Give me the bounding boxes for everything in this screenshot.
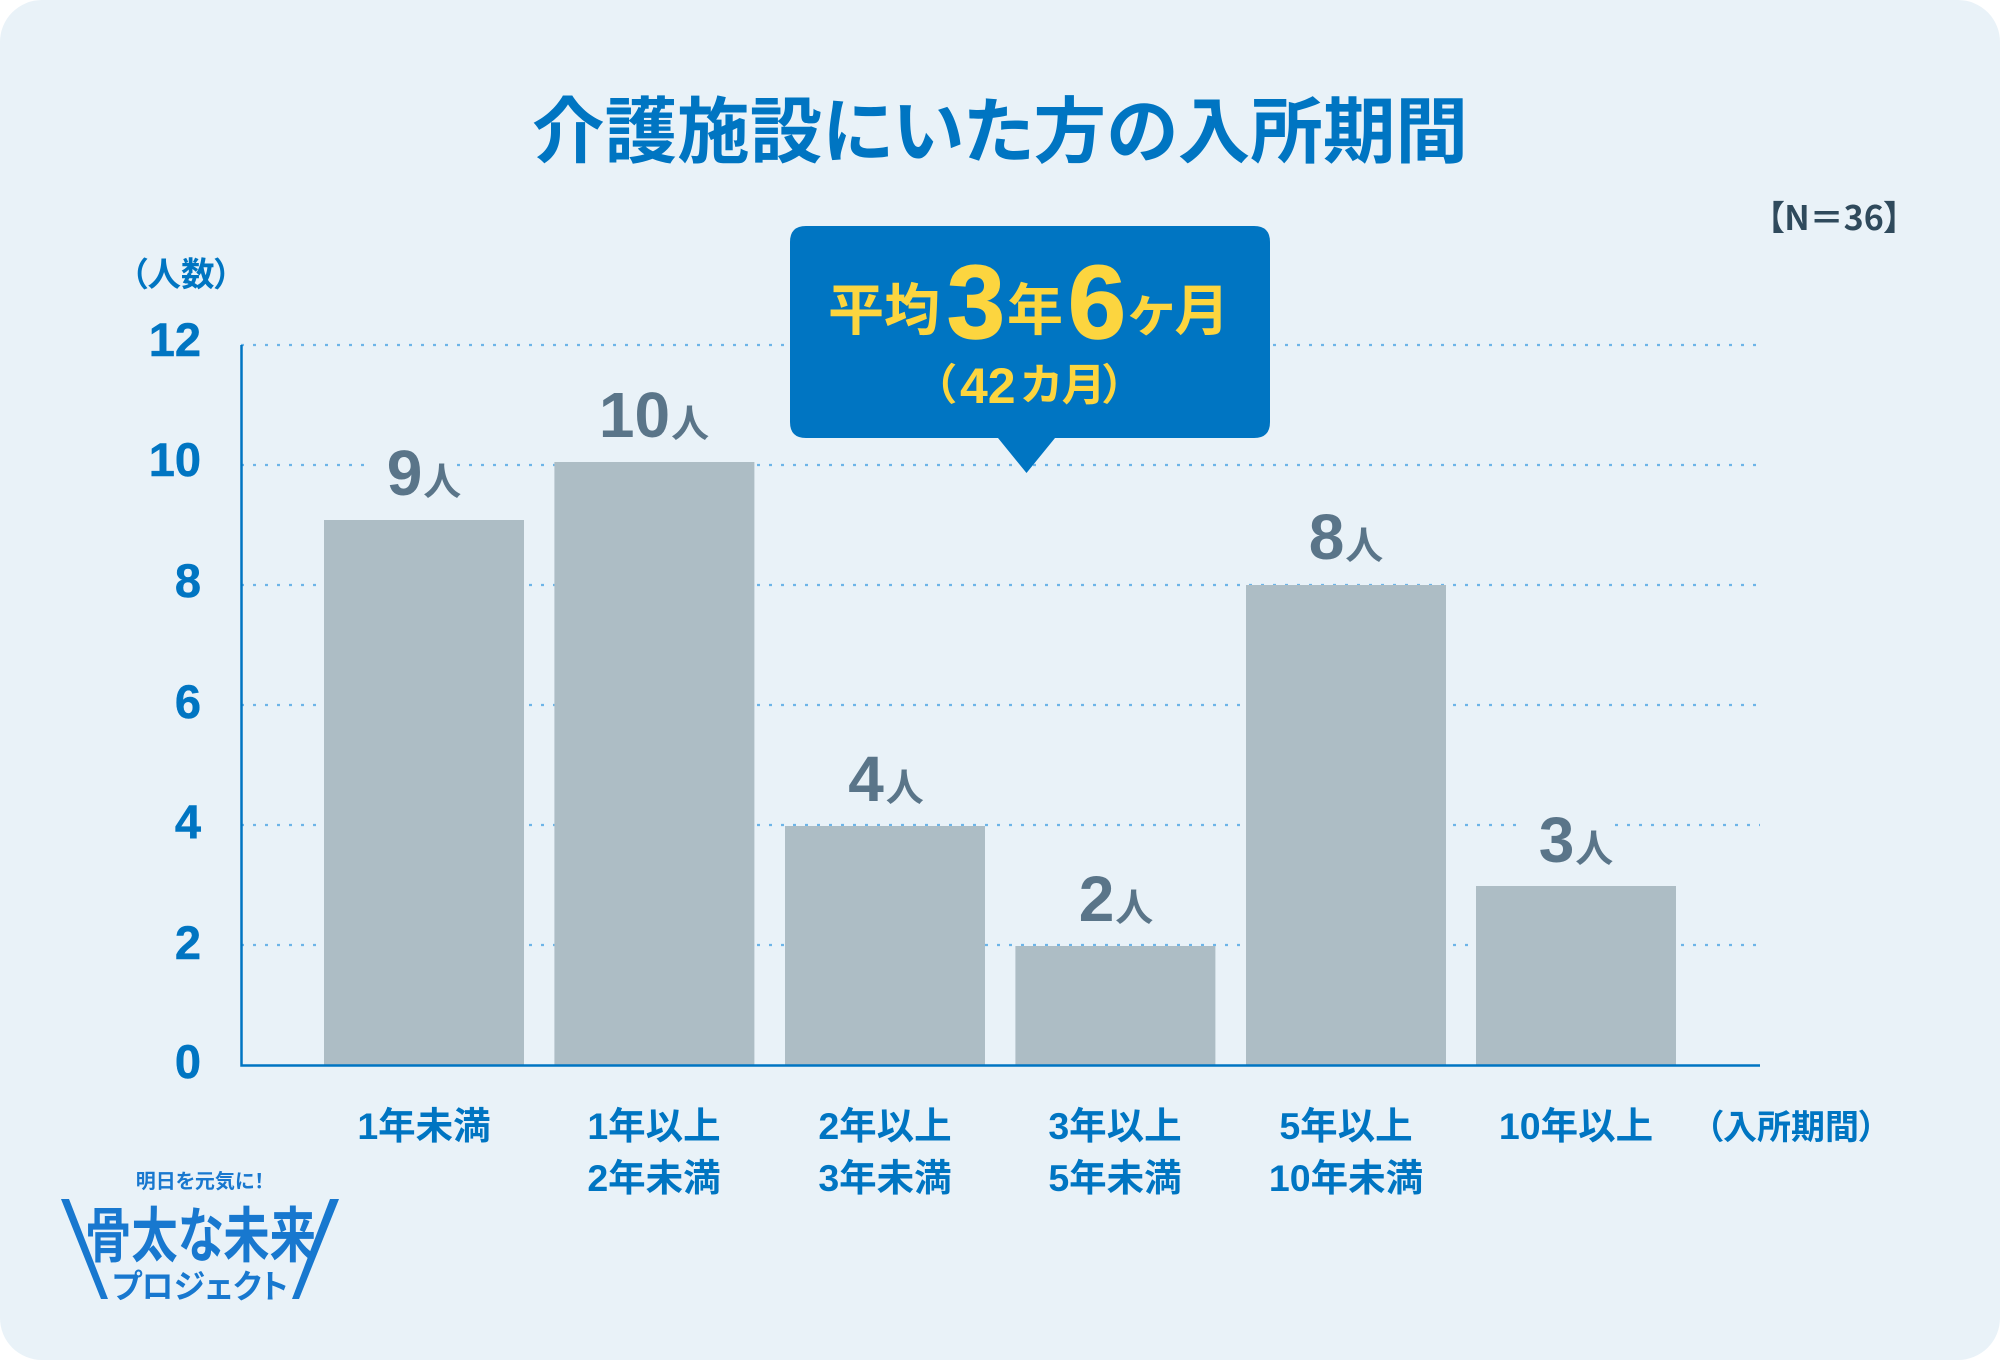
sample size note: 【N＝36】 <box>1767 191 1901 240</box>
callout sub figure: カ月 <box>1021 349 1106 413</box>
y axis tick labels: 4 <box>175 795 201 848</box>
y axis tick labels <box>149 313 201 1088</box>
callout: average stay <box>790 226 1270 473</box>
value labels: 2人 <box>1079 863 1153 935</box>
category labels: 5年未満 <box>1048 1147 1182 1202</box>
category labels: 3年以上 <box>1048 1095 1182 1150</box>
y axis tick labels: 8 <box>175 554 201 607</box>
category labels: 1年以上 <box>587 1095 721 1150</box>
callout main figure: 6 <box>1068 245 1126 361</box>
callout main figure <box>828 245 1229 361</box>
logo sub wordmark: プロジェクト <box>112 1260 288 1308</box>
bars <box>324 462 1676 1065</box>
category labels: 5年以上 <box>1279 1095 1413 1150</box>
title: 介護施設にいた方の入所期間 <box>532 73 1468 178</box>
value labels: 4人 <box>848 743 924 815</box>
category labels: 10年以上 <box>1499 1095 1653 1150</box>
logo left bracket <box>61 1199 108 1299</box>
callout main figure: 年 <box>1007 266 1063 347</box>
callout sub figure <box>934 349 1124 414</box>
callout sub figure: ） <box>1102 351 1124 413</box>
callout main figure: 平均 <box>828 266 940 347</box>
value labels <box>387 379 1613 935</box>
callout main figure: 3 <box>947 245 1005 361</box>
category labels: 3年未満 <box>818 1147 952 1202</box>
callout sub figure: （ <box>934 351 956 413</box>
value labels: 10人 <box>599 379 709 451</box>
category labels: 10年未満 <box>1269 1147 1423 1202</box>
logo main wordmark: 骨太な未来 <box>85 1188 316 1275</box>
value labels: 3人 <box>1539 804 1613 876</box>
value labels: 8人 <box>1309 501 1383 573</box>
y axis tick labels: 12 <box>149 313 201 366</box>
y axis tick labels: 2 <box>175 916 201 969</box>
bar chart <box>149 313 1876 1202</box>
logo right bracket <box>292 1199 339 1299</box>
y axis tick labels: 10 <box>149 433 201 486</box>
y axis tick labels: 0 <box>175 1035 201 1088</box>
axes <box>242 345 1760 1066</box>
category labels: 1年未満 <box>357 1095 491 1150</box>
y axis tick labels: 6 <box>175 675 201 728</box>
value labels: 9人 <box>387 437 461 509</box>
logo tagline: 明日を元気に！ <box>136 1165 264 1194</box>
logo: 骨太な未来プロジェクト <box>61 1165 339 1308</box>
category labels: 2年未満 <box>587 1147 721 1202</box>
x axis unit label: （入所期間） <box>1706 1100 1876 1149</box>
y axis unit label: （人数） <box>131 247 231 296</box>
category labels <box>357 1095 1653 1202</box>
callout sub figure: 42 <box>960 358 1016 414</box>
category labels: 2年以上 <box>818 1095 952 1150</box>
callout main figure: ヶ月 <box>1128 266 1229 346</box>
